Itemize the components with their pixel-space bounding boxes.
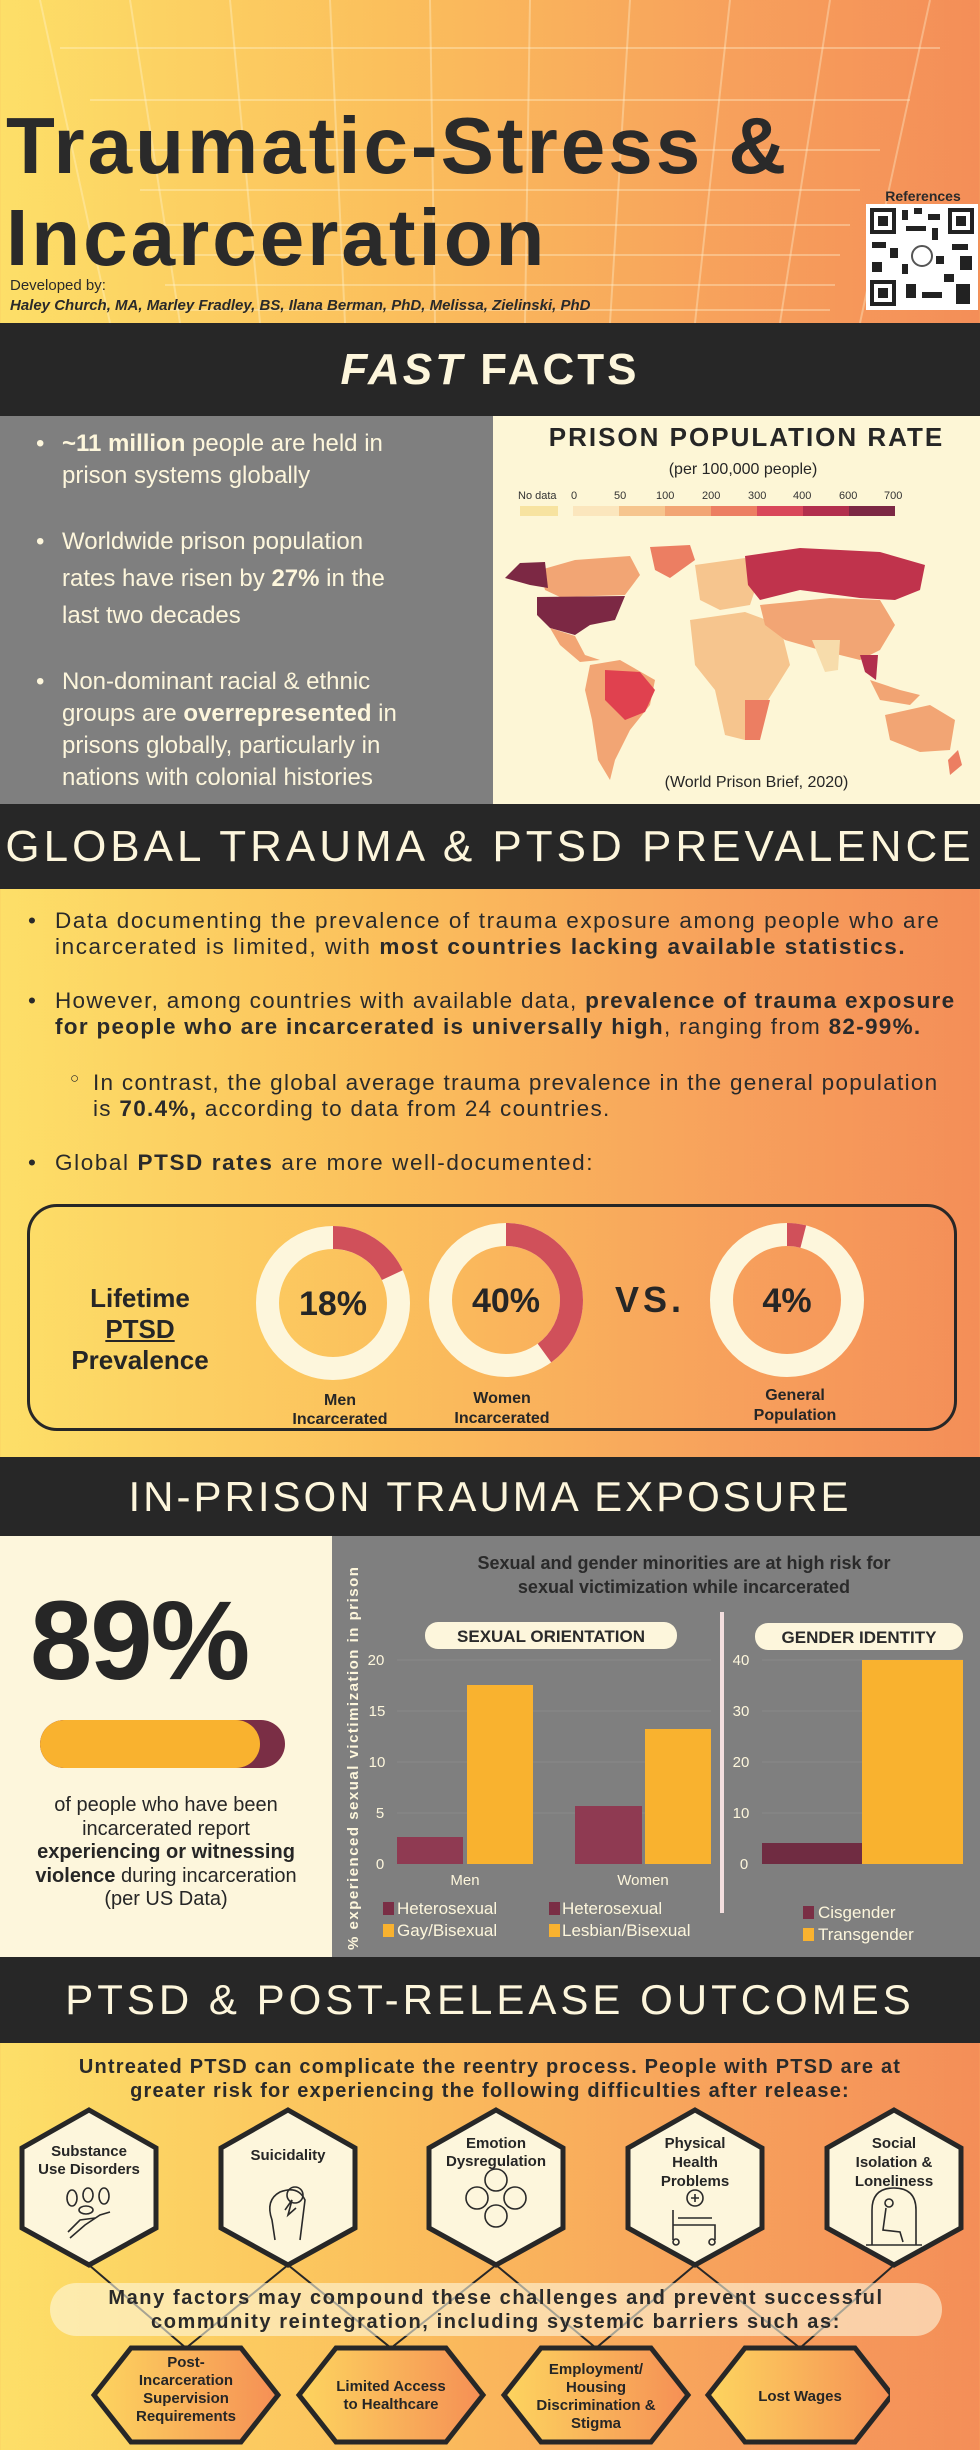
- donut charts: 18%: [299, 1285, 367, 1323]
- panel: prison population map: [493, 416, 980, 804]
- panel: sexual victimization charts: 40: [733, 1652, 749, 1669]
- map legend: 300: [748, 490, 766, 502]
- panel: sexual victimization charts: 10: [369, 1754, 385, 1771]
- text block: reentry intro: [79, 2056, 901, 2102]
- panel: sexual victimization charts: Sexual and gender minorities are at high risk for: [477, 1553, 891, 1573]
- panel: 89% stat: [0, 1536, 332, 1957]
- authors: Haley Church, MA, Marley Fradley, BS, Ilana Berman, PhD, Melissa, Zielinski, PhD: [10, 297, 590, 314]
- text block: global trauma bullets: In contrast, the global average trauma prevalence in the general population: [93, 1070, 938, 1095]
- bullet: 11 million: [36, 430, 383, 489]
- map subtitle: (per 100,000 people): [669, 461, 817, 478]
- bullet: 27%: last two decades: [62, 602, 241, 629]
- diagram: outcome hexagons: Health: [672, 2154, 718, 2171]
- diagram: outcome hexagons: Substance: [51, 2143, 127, 2160]
- panel: sexual victimization charts: SEXUAL ORIENTATION: [457, 1627, 645, 1646]
- text block: global trauma bullets: is 70.4%, according to data from 24 countries.: [93, 1096, 611, 1121]
- label: lifetime PTSD prevalence: Lifetime: [90, 1283, 190, 1313]
- diagram: outcome hexagons: Problems: [661, 2173, 729, 2190]
- progress bar: [40, 1720, 285, 1768]
- bullet: 27%: rates have risen by 27% in the: [62, 565, 385, 592]
- header background grid: [39, 0, 940, 323]
- map legend: 50: [614, 490, 626, 502]
- text block: global trauma bullets: incarcerated is limited, with most countries lacking available statistics.: [55, 934, 906, 959]
- post-release heading: [0, 1957, 980, 2043]
- barrier hexagons: Discrimination &: [536, 2397, 656, 2414]
- description: incarcerated report: [82, 1818, 250, 1840]
- description: experiencing or witnessing: [37, 1841, 295, 1863]
- label: lifetime PTSD prevalence: [71, 1283, 209, 1375]
- diagram: outcome hexagons: Social: [872, 2135, 916, 2152]
- panel: sexual victimization charts: Heterosexual: [397, 1899, 497, 1918]
- text block: global trauma bullets: •: [28, 1150, 37, 1175]
- bullet: 11 million: prison systems globally: [62, 462, 310, 489]
- panel: sexual victimization charts: 10: [733, 1805, 749, 1822]
- diagram: outcome hexagons: Emotion: [466, 2135, 526, 2152]
- text block: reentry intro: greater risk for experiencing the following difficulties after release:: [130, 2080, 850, 2102]
- title: [6, 101, 789, 282]
- donut charts: Incarcerated: [292, 1411, 388, 1428]
- barrier hexagons: Limited Access: [336, 2378, 446, 2395]
- panel: lifetime PTSD prevalence: [27, 1204, 957, 1431]
- barrier hexagons: Lost Wages: [758, 2388, 842, 2405]
- text block: global trauma bullets: for people who are incarcerated is universally high, ranging from 82-99%.: [55, 1014, 921, 1039]
- callout: compounding factors: community reintegration, including systemic barriers such as:: [151, 2311, 841, 2333]
- map legend: 600: [839, 490, 857, 502]
- diagram: outcome hexagons: Loneliness: [855, 2173, 933, 2190]
- authors: Developed by:: [10, 277, 106, 294]
- diagram: outcome hexagons: Dysregulation: [446, 2153, 546, 2170]
- panel: sexual victimization charts: Men: [450, 1872, 480, 1889]
- world map: [505, 545, 962, 780]
- title: Traumatic-Stress &: [6, 101, 789, 190]
- map legend: No data: [518, 490, 557, 502]
- bullet: overrepresented: prisons globally, particularly in: [62, 732, 380, 759]
- barrier hexagons: Post-: [167, 2354, 205, 2371]
- callout: compounding factors: [50, 2283, 942, 2336]
- bullet: 27%: Worldwide prison population: [62, 528, 363, 555]
- panel: sexual victimization charts: 0: [376, 1856, 384, 1873]
- donut charts: VS.: [615, 1279, 685, 1320]
- diagram: outcome hexagons: Isolation &: [856, 2154, 933, 2171]
- map caption: (World Prison Brief, 2020): [665, 774, 848, 791]
- label: lifetime PTSD prevalence: PTSD: [105, 1314, 175, 1344]
- panel: sexual victimization charts: 20: [368, 1652, 384, 1669]
- diagram: outcome hexagons: Suicidality: [250, 2147, 326, 2164]
- map title: PRISON POPULATION RATE: [549, 422, 944, 452]
- panel: sexual victimization charts: Lesbian/Bisexual: [562, 1921, 691, 1940]
- bullet: overrepresented: [36, 668, 397, 791]
- text block: global trauma bullets: Global PTSD rates are more well-documented:: [55, 1150, 594, 1175]
- text block: global trauma bullets: Data documenting the prevalence of trauma exposure among people who are: [55, 908, 940, 933]
- post-release heading: PTSD & POST-RELEASE OUTCOMES: [65, 1976, 915, 2023]
- barrier hexagons: Housing: [566, 2379, 626, 2396]
- panel: sexual victimization charts: [332, 1536, 980, 1957]
- callout: compounding factors: Many factors may compound these challenges and prevent successful: [108, 2287, 884, 2309]
- diagram: outcome hexagons: Use Disorders: [38, 2161, 140, 2178]
- diagram: outcome hexagons: Physical: [665, 2135, 725, 2152]
- panel: sexual victimization charts: Heterosexual: [562, 1899, 662, 1918]
- map legend: [518, 490, 902, 516]
- donut charts: Women: [473, 1390, 531, 1407]
- panel: sexual victimization charts: % experienced sexual victimization in prison: [345, 1566, 362, 1950]
- panel: sexual victimization charts: Gay/Bisexual: [397, 1921, 497, 1940]
- in-prison heading: [0, 1457, 980, 1536]
- panel: sexual victimization charts: GENDER IDENTITY: [782, 1628, 937, 1647]
- map legend: 0: [571, 490, 577, 502]
- bullet: overrepresented: Non-dominant racial & ethnic: [62, 668, 370, 695]
- panel: sexual victimization charts: Transgender: [818, 1925, 914, 1944]
- references QR: [866, 188, 978, 310]
- panel: sexual victimization charts: Cisgender: [818, 1903, 896, 1922]
- bullet: 27%: •: [36, 528, 44, 555]
- bullet: overrepresented: nations with colonial histories: [62, 764, 373, 791]
- donut charts: 40%: [472, 1282, 540, 1320]
- title: Incarceration: [6, 193, 547, 282]
- donut charts: General: [765, 1387, 825, 1404]
- fast facts heading: FAST FACTS: [341, 345, 639, 394]
- text block: reentry intro: Untreated PTSD can complicate the reentry process. People with PTSD are at: [79, 2056, 901, 2078]
- barrier hexagons: Supervision: [143, 2390, 229, 2407]
- big number: 89%: [30, 1578, 248, 1703]
- barrier hexagons: to Healthcare: [343, 2396, 439, 2413]
- text block: global trauma bullets: ○: [70, 1070, 81, 1087]
- diagram: outcome hexagons: [20, 2107, 964, 2346]
- donut charts: Incarcerated: [454, 1410, 550, 1427]
- donut charts: 4%: [762, 1282, 812, 1320]
- barrier hexagons: Stigma: [571, 2415, 622, 2432]
- panel: sexual victimization charts: 15: [369, 1703, 385, 1720]
- description: (per US Data): [104, 1888, 228, 1910]
- barrier hexagons: Incarceration: [139, 2372, 233, 2389]
- text block: global trauma bullets: •: [28, 988, 37, 1013]
- description: of people who have been: [54, 1794, 278, 1816]
- donut charts: Population: [754, 1407, 836, 1424]
- global trauma heading: GLOBAL TRAUMA & PTSD PREVALENCE: [5, 822, 975, 871]
- authors: [10, 277, 590, 314]
- label: lifetime PTSD prevalence: Prevalence: [71, 1345, 209, 1375]
- panel: sexual victimization charts: Women: [617, 1872, 669, 1889]
- barrier hexagons: Employment/: [549, 2361, 644, 2378]
- panel: sexual victimization charts: 30: [733, 1703, 749, 1720]
- panel: sexual victimization charts: 20: [733, 1754, 749, 1771]
- description: [35, 1794, 297, 1910]
- description: violence during incarceration: [35, 1864, 297, 1886]
- map legend: 400: [793, 490, 811, 502]
- map legend: 100: [656, 490, 674, 502]
- bullet: 11 million: •: [36, 430, 44, 457]
- panel: sexual victimization charts: 0: [740, 1856, 748, 1873]
- text block: global trauma bullets: However, among countries with available data, prevalence of trauma exposure: [55, 988, 955, 1013]
- panel: sexual victimization charts: sexual victimization while incarcerated: [518, 1577, 850, 1597]
- donut charts: [256, 1223, 864, 1428]
- bullet: 27%: [36, 528, 385, 629]
- bullet: 11 million: ~11 million people are held in: [62, 430, 383, 457]
- references QR: References: [885, 188, 961, 204]
- bullet: overrepresented: groups are overrepresented in: [62, 700, 397, 727]
- panel: sexual victimization charts: 5: [376, 1805, 384, 1822]
- in-prison heading: IN-PRISON TRAUMA EXPOSURE: [128, 1473, 852, 1520]
- donut charts: Men: [324, 1392, 356, 1409]
- text block: global trauma bullets: •: [28, 908, 37, 933]
- map legend: 700: [884, 490, 902, 502]
- barrier hexagons: [90, 2346, 890, 2444]
- bullet: overrepresented: •: [36, 668, 44, 695]
- barrier hexagons: Requirements: [136, 2408, 236, 2425]
- global trauma heading: [0, 804, 980, 889]
- fast facts heading: [0, 323, 980, 416]
- panel: fast facts bullets: [0, 416, 493, 804]
- text block: global trauma bullets: [28, 908, 955, 1175]
- map legend: 200: [702, 490, 720, 502]
